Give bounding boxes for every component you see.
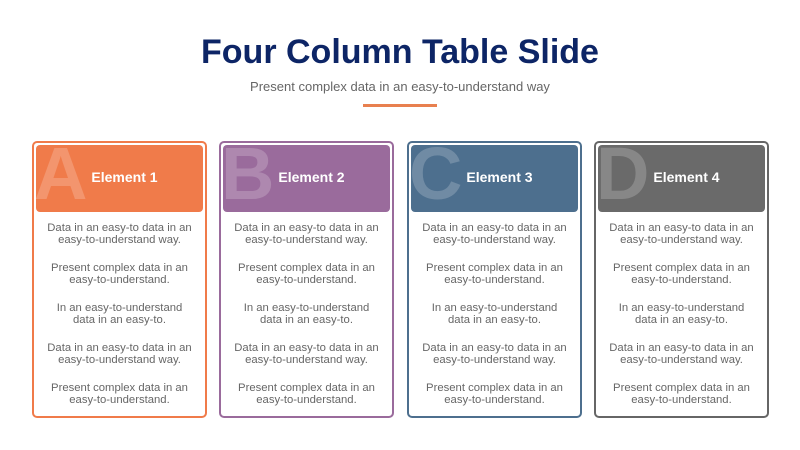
text: element 1: easy-to-understand way. [58,354,181,366]
text: element 3: Present complex data in an [426,382,563,394]
text: element 2: Data in an easy-to data in an [234,342,379,354]
text: element 3: easy-to-understand. [444,274,545,286]
header: element 3 [411,145,578,212]
text: element 1: Data in an easy-to data in an [47,222,192,234]
text: element 2: data in an easy-to. [260,314,353,326]
text: element 3: easy-to-understand way. [433,354,556,366]
text: element 3 [422,222,567,406]
header: element 1 [36,145,203,212]
header: element 4 [598,145,765,212]
title: Four Column Table Slide [201,33,599,71]
text: element 2: Present complex data in an [238,262,375,274]
text: element 4 [609,222,754,406]
text: element 1: easy-to-understand. [69,394,170,406]
header: element 1: Element 1 [91,169,158,185]
text: element 1 [47,222,192,406]
text: element 2: Present complex data in an [238,382,375,394]
text: element 3: data in an easy-to. [448,314,541,326]
text: element 3: Data in an easy-to data in an [422,342,567,354]
text: element 4: Data in an easy-to data in an [609,342,754,354]
text: element 1: data in an easy-to. [73,314,166,326]
text: element 4: Present complex data in an [613,382,750,394]
text: element 4: easy-to-understand. [631,274,732,286]
subtitle: Present complex data in an easy-to-understand way [250,79,550,94]
text: element 2: easy-to-understand way. [245,234,368,246]
header: element 3: Element 3 [466,169,533,185]
text: element 2: easy-to-understand way. [245,354,368,366]
text: element 4: easy-to-understand way. [620,234,743,246]
header: element 2 [223,145,390,212]
text: element 3: In an easy-to-understand [432,302,557,314]
text: element 1: Data in an easy-to data in an [47,342,192,354]
panel: element 4 [594,141,769,418]
text: element 3: Data in an easy-to data in an [422,222,567,234]
panel: element 3 [407,141,582,418]
text: element 4: Present complex data in an [613,262,750,274]
text: element 2: In an easy-to-understand [244,302,369,314]
text: element 3: Present complex data in an [426,262,563,274]
text: element 1: Present complex data in an [51,262,188,274]
text: element 2: easy-to-understand. [256,394,357,406]
text: element 4: data in an easy-to. [635,314,728,326]
text: element 2: easy-to-understand. [256,274,357,286]
panel: element 1 [32,141,207,418]
text: element 1: In an easy-to-understand [57,302,182,314]
header: element 4: Element 4 [653,169,720,185]
header: element 2: Element 2 [278,169,345,185]
text: element 3: easy-to-understand. [444,394,545,406]
text: element 4: Data in an easy-to data in an [609,222,754,234]
panel: element 2 [219,141,394,418]
text: element 1: easy-to-understand. [69,274,170,286]
text: element 1: Present complex data in an [51,382,188,394]
text: element 4: easy-to-understand way. [620,354,743,366]
text: element 4: easy-to-understand. [631,394,732,406]
text: element 3: easy-to-understand way. [433,234,556,246]
text: element 2 [234,222,379,406]
text: element 4: In an easy-to-understand [619,302,744,314]
text: element 2: Data in an easy-to data in an [234,222,379,234]
accent line [363,104,437,107]
text: element 1: easy-to-understand way. [58,234,181,246]
